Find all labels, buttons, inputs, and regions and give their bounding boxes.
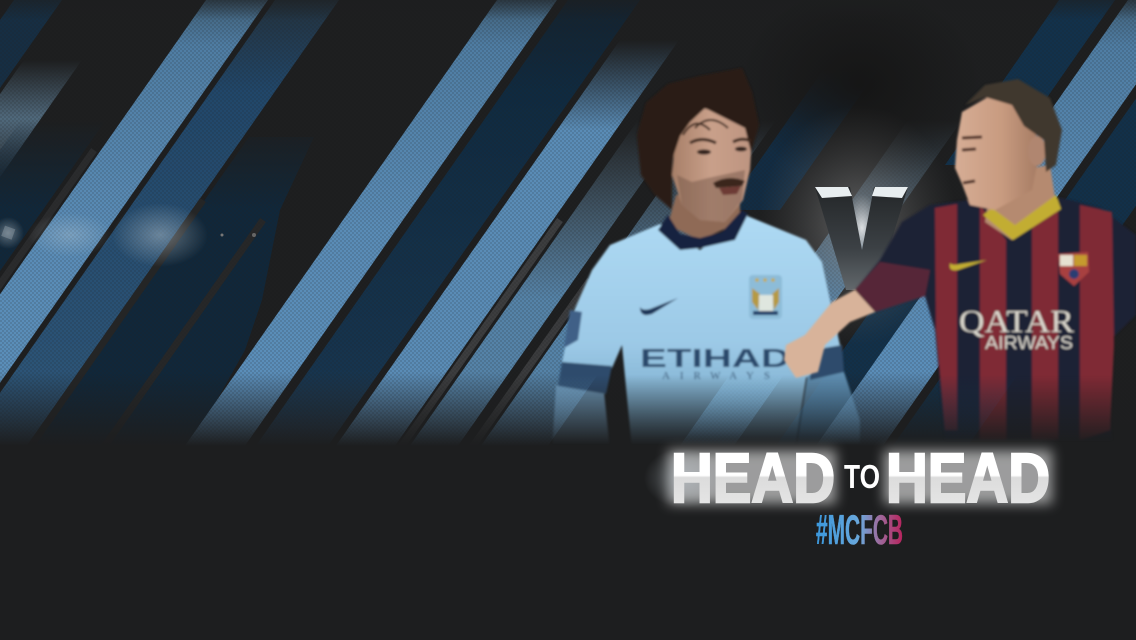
right arm: [798, 370, 861, 440]
title: HEAD TO HEAD: HEAD: [886, 439, 1050, 517]
right cuff: [810, 345, 844, 380]
central grey glow: [758, 105, 958, 345]
title flare: [644, 448, 724, 508]
nike swoosh: [950, 260, 987, 270]
red stripes: [935, 204, 1114, 440]
qatar airways sponsor: AIRWAYS: [985, 333, 1073, 353]
face: [672, 108, 752, 222]
player: Manchester City: [552, 68, 860, 450]
thin grey lines between stripes: [0, 150, 590, 460]
sleeve tint: [855, 262, 930, 312]
qatar airways sponsor: QATAR: [959, 303, 1075, 339]
moustache: [713, 178, 745, 188]
left cuff: [558, 362, 612, 394]
sleeve patch: [564, 310, 582, 348]
hair: [637, 68, 759, 210]
yellow collar: [983, 195, 1061, 240]
shirt: [855, 198, 1136, 440]
qatar airways sponsor: [958, 308, 1076, 352]
face: [955, 90, 1040, 210]
left arm: [552, 384, 608, 441]
etihad sponsor: ETIHAD: [640, 343, 790, 373]
barcelona crest: [1058, 252, 1089, 286]
neck: [668, 190, 740, 240]
forearm and hand: [784, 286, 880, 378]
title: HEAD TO HEAD: [671, 439, 1050, 517]
eyes: [697, 147, 747, 155]
brows: [690, 139, 751, 143]
diagonal stripes: [0, 0, 1136, 460]
player: Barcelona: [784, 79, 1136, 440]
neck: [985, 165, 1056, 240]
V letter: [815, 187, 908, 290]
hair strands: [683, 120, 728, 135]
nike swoosh: [640, 298, 678, 315]
infographic canvas: #MCFCB: [816, 506, 903, 553]
shirt: [562, 215, 840, 450]
title: HEAD TO HEAD: HEAD: [671, 439, 835, 517]
lens flare: [0, 203, 256, 267]
bottom and top fade: [0, 0, 1136, 472]
mouth: [719, 186, 741, 195]
title glow: [668, 450, 1052, 504]
title: HEAD TO HEAD: TO: [844, 458, 880, 495]
eye, brow and mouth: [962, 137, 982, 183]
hair: [965, 79, 1062, 172]
collar: [658, 210, 748, 250]
etihad sponsor: [641, 348, 787, 380]
ear: [656, 152, 672, 178]
halftone texture: [0, 0, 1136, 450]
ear: [1034, 134, 1047, 167]
city crest: [749, 275, 782, 319]
beard shadow: [677, 170, 745, 222]
etihad sponsor: AIRWAYS: [662, 370, 770, 382]
central dark halo: [740, 0, 980, 185]
